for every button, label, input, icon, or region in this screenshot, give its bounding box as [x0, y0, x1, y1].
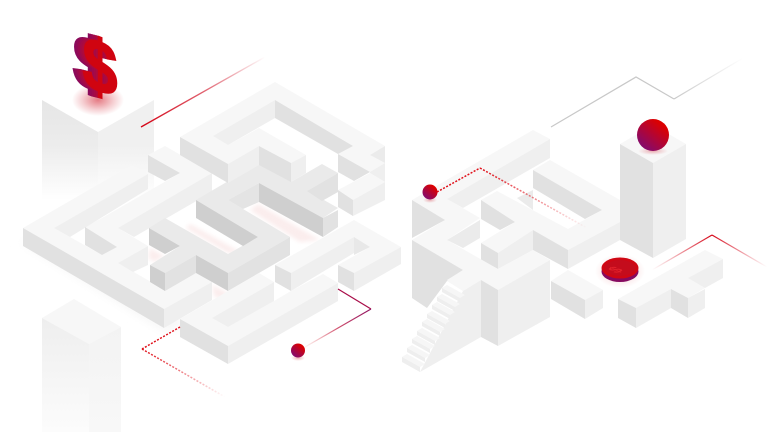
arrow line: red top left [141, 57, 265, 127]
ball: small lower [291, 344, 305, 361]
maze: hook wall [275, 220, 401, 291]
maze: bottom U-shaped wall [180, 273, 338, 364]
maze right: rear walls [481, 160, 620, 269]
tower: right pedestal [620, 125, 686, 258]
icon: 3D dollar sign: $ [77, 17, 111, 112]
dotted path: lower left [142, 327, 225, 397]
icon: coin [595, 254, 645, 288]
tower: upper left pedestal [42, 100, 154, 200]
maze: long lower-left wall [23, 146, 212, 328]
maze right: T-shaped block [618, 250, 723, 328]
icon: 3D dollar sign: $ [79, 18, 113, 113]
floor shadow and pink glows under maze [18, 204, 320, 330]
icon: 3D dollar sign: $ [73, 16, 107, 111]
staircase [402, 270, 481, 372]
tower: lower left pedestal [42, 299, 121, 432]
icon: dollar glow [72, 84, 124, 116]
red line: right [652, 235, 767, 270]
maze: upper C-shaped wall [180, 82, 385, 183]
maze right: small block [551, 270, 603, 319]
ball: small on maze [422, 184, 438, 203]
maze: small right block [338, 173, 385, 216]
icon: 3D dollar sign: $ [83, 19, 117, 114]
maze right: big cube [481, 260, 550, 346]
ball: large on tower [637, 119, 669, 155]
maze right: top bar and big wall [412, 130, 550, 308]
grey line: top right [551, 58, 743, 127]
icon: 3D dollar sign: $ [81, 18, 115, 113]
maze: central darker tier [149, 163, 338, 291]
icon: 3D dollar sign: $ [75, 17, 109, 112]
dotted path: right maze [437, 168, 587, 228]
arrow line: maze exit to ball [305, 289, 371, 347]
icon: coin: $ [605, 265, 628, 275]
